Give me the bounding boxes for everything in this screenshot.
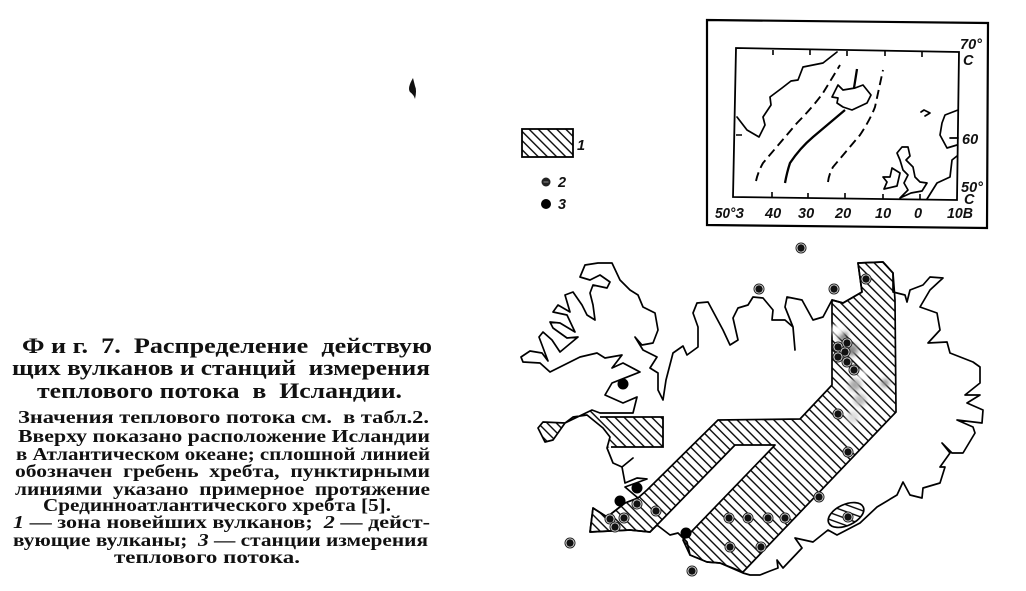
active volcanoes	[565, 243, 871, 576]
inset Faroe islands	[921, 110, 930, 116]
map of Iceland	[521, 243, 983, 576]
caption body text: линиями указано примерное протяжение	[15, 479, 430, 499]
inset Norway	[940, 110, 958, 148]
zone of recent volcanism, western	[538, 410, 663, 448]
inset east dashed line	[828, 70, 883, 182]
hatched ellipse around volcano	[824, 497, 868, 533]
inset coordinate labels: 70°	[960, 37, 982, 53]
caption body text: теплового потока.	[114, 547, 300, 567]
inset Greenland coast	[737, 52, 837, 137]
inset coordinate labels: 30	[798, 206, 814, 222]
caption body text: в Атлантическом океане; сплошной линией	[16, 444, 430, 464]
inset ridge crest	[785, 69, 857, 183]
caption	[12, 333, 432, 567]
inset Britain	[897, 147, 927, 198]
caption title: теплового потока в Исландии.	[37, 378, 402, 403]
inset outer frame	[707, 20, 988, 228]
caption body text	[13, 407, 430, 567]
inset continental Europe	[927, 156, 957, 199]
zone western edge	[600, 417, 663, 447]
inset coordinate labels: 50°	[961, 180, 983, 196]
inset locator map	[707, 20, 988, 228]
legend	[522, 129, 585, 213]
caption body text: Вверху показано расположение Исландии	[18, 426, 430, 446]
smudged print area	[832, 324, 889, 423]
caption title: щих вулканов и станций измерения	[12, 355, 430, 380]
ink speck	[409, 78, 416, 99]
inset coordinate labels: С	[963, 53, 974, 69]
caption body text: Значения теплового потока см. в табл.2.	[18, 407, 429, 427]
caption body text: вующие вулканы; 3 — станции измерения	[13, 530, 428, 550]
inset coordinate labels: 50°З	[715, 206, 744, 222]
inset graticule ticks	[736, 50, 922, 199]
inset map frame	[733, 48, 959, 200]
legend item 2: active volcano: 2	[557, 175, 566, 191]
caption body text: Срединноатлантического хребта [5].	[43, 495, 391, 515]
inset Iceland	[832, 85, 871, 110]
inset coordinate labels: 10В	[947, 206, 973, 222]
inset coordinate labels: С	[964, 192, 975, 208]
inset coordinate labels: 20	[834, 206, 851, 222]
inset coordinate labels	[715, 37, 983, 222]
legend item 1: hatched zone: 1	[577, 138, 585, 154]
caption body text: 1 — зона новейших вулканов; 2 — дейст-	[13, 512, 430, 532]
zone of recent volcanism, main	[590, 262, 896, 572]
inset coordinate labels: 40	[764, 206, 781, 222]
heat flow stations	[614, 378, 692, 538]
inset Ireland	[883, 168, 900, 189]
caption title	[12, 333, 432, 403]
caption title: Ф и г. 7. Распределение действую	[22, 333, 432, 358]
inset coordinate labels: 10	[875, 206, 891, 222]
Iceland coastline	[521, 262, 983, 575]
inset coordinate labels: 0	[914, 206, 922, 222]
inset coordinate labels: 60	[962, 132, 978, 148]
caption body text: обозначен гребень хребта, пунктирными	[15, 461, 430, 481]
inset west dashed line	[756, 65, 840, 181]
legend item 3: station: 3	[558, 197, 566, 213]
